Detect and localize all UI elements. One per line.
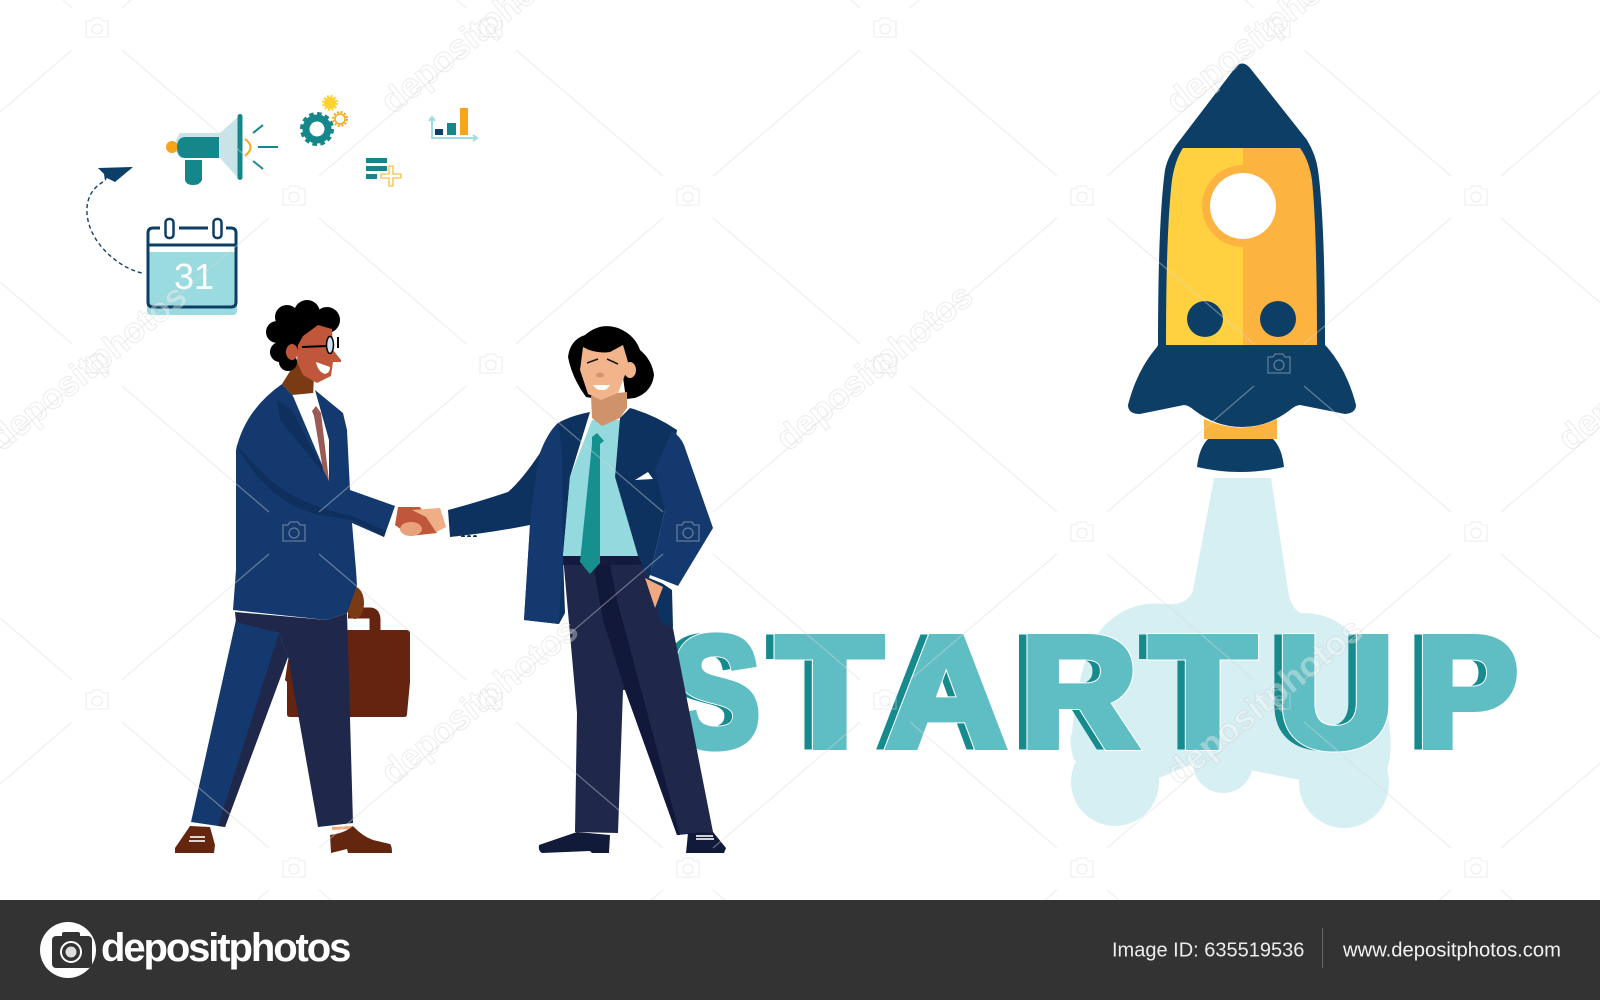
- STARTUP wordmark: U: [1277, 605, 1394, 780]
- STARTUP wordmark: P: [1408, 605, 1509, 780]
- shoes: [175, 826, 215, 853]
- footer logo: [40, 922, 350, 978]
- rocket body: [1128, 64, 1356, 427]
- hair: [568, 326, 654, 399]
- front arm hand overlap: [430, 508, 446, 532]
- icon: list with plus: [366, 158, 401, 186]
- porthole: [1202, 165, 1243, 247]
- glasses: [302, 336, 338, 354]
- neck: [591, 392, 627, 426]
- rocket: [1128, 64, 1356, 472]
- STARTUP wordmark: T: [768, 605, 874, 780]
- cuff: [649, 575, 678, 589]
- footer bar: [0, 900, 1600, 1000]
- rocket exhaust cloud: [1070, 478, 1390, 828]
- watermark: depositphotos: [373, 610, 585, 792]
- STARTUP wordmark: U: [1268, 605, 1385, 780]
- icon: calendar: [147, 219, 237, 315]
- image id: Image ID: 635519536: [1112, 940, 1304, 962]
- STARTUP wordmark: R: [1021, 605, 1137, 780]
- businessman with briefcase: [175, 300, 446, 853]
- jacket left panel and arm: [448, 412, 590, 624]
- shirt: [563, 420, 638, 556]
- icon: megaphone: [166, 114, 278, 185]
- STARTUP wordmark: S: [671, 605, 760, 780]
- hand in pocket: [645, 578, 663, 608]
- cuff buttons: [461, 535, 477, 537]
- STARTUP wordmark: T: [777, 605, 882, 780]
- face: [580, 345, 628, 400]
- STARTUP wordmark: P: [1417, 605, 1518, 780]
- nozzle: [1204, 419, 1277, 439]
- STARTUP wordmark: T: [777, 605, 882, 780]
- shirt: [292, 393, 328, 480]
- STARTUP wordmark: R: [1021, 605, 1137, 780]
- watermark: depositphotos: [1158, 610, 1370, 792]
- front leg: [191, 620, 288, 827]
- pants: [563, 556, 713, 835]
- STARTUP wordmark: A: [877, 605, 997, 780]
- STARTUP wordmark: T: [1141, 605, 1246, 780]
- back leg: [235, 612, 353, 827]
- STARTUP wordmark: A: [886, 605, 1006, 780]
- rivets: [1187, 301, 1223, 337]
- shoes: [539, 832, 610, 853]
- businessman in teal tie: [448, 326, 726, 853]
- briefcase: [285, 587, 410, 717]
- STARTUP wordmark: R: [1012, 605, 1128, 780]
- STARTUP wordmark: A: [886, 605, 1006, 780]
- calendar date: 31: [174, 256, 214, 297]
- STARTUP wordmark: S: [662, 605, 751, 780]
- shaking hands: [395, 507, 446, 536]
- tie: [312, 406, 329, 481]
- STARTUP wordmark: [662, 605, 1518, 780]
- watermark: depositphotos: [768, 276, 980, 458]
- face: [297, 325, 341, 383]
- website: www.depositphotos.com: [1342, 940, 1561, 962]
- STARTUP wordmark: S: [671, 605, 760, 780]
- icon: gears: [302, 96, 347, 144]
- footer logo: depositphotos: [101, 926, 350, 970]
- eyes, nose and smile: [587, 359, 618, 390]
- STARTUP wordmark: U: [1277, 605, 1394, 780]
- icon: paper plane: [87, 167, 142, 273]
- suit jacket: [233, 384, 395, 620]
- STARTUP wordmark: P: [1417, 605, 1518, 780]
- tie: [580, 433, 604, 574]
- jacket right panel and sleeve: [615, 408, 677, 627]
- pocket square: [635, 472, 653, 480]
- neck: [282, 360, 314, 397]
- icon: bar chart: [429, 108, 477, 141]
- STARTUP wordmark: T: [1150, 605, 1256, 780]
- rocket window panel: [1166, 148, 1243, 345]
- jacket shading: [236, 400, 386, 537]
- smile: [316, 362, 330, 374]
- STARTUP wordmark: T: [1150, 605, 1256, 780]
- hair: [266, 300, 340, 371]
- watermark: [0, 0, 1600, 792]
